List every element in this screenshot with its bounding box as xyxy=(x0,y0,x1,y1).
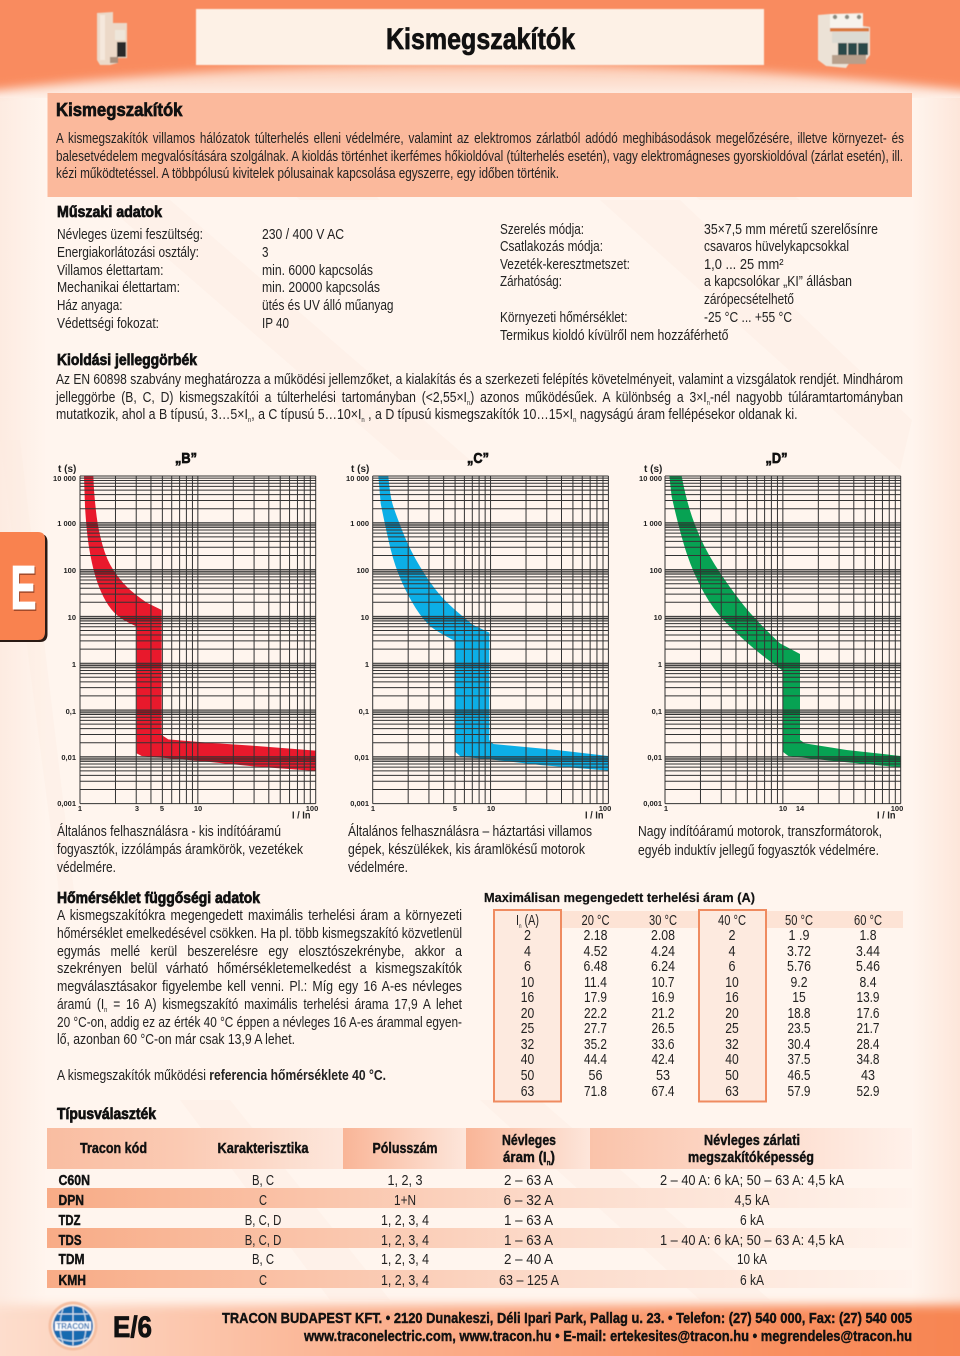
table header row: 50 °C xyxy=(785,913,813,929)
axis labels C: 10 xyxy=(487,804,495,813)
table data rows: 42.4 xyxy=(652,1052,674,1068)
tech data right column: 35×7,5 mm méretű szerelősínre xyxy=(704,222,878,238)
header cells: ) xyxy=(551,1150,555,1166)
row: C60N: 2 – 40 A: 6 kA; 50 – 63 A: 4,5 kA xyxy=(660,1173,844,1189)
table data rows: 28.4 xyxy=(856,1037,880,1053)
tech data right column: Termikus kioldó kívülről nem hozzáférhető xyxy=(500,328,728,344)
table data rows: 4 xyxy=(728,944,736,960)
table header row: (A) xyxy=(522,913,539,929)
row: DPN: DPN xyxy=(58,1193,84,1209)
table data rows: 2.18 xyxy=(584,928,608,944)
axis labels D: I / In xyxy=(877,810,896,822)
tech data left column: Névleges üzemi feszültség: xyxy=(57,227,203,243)
section tab E: E xyxy=(10,554,36,623)
header cells xyxy=(47,1128,912,1169)
axis labels B: 0,1 xyxy=(66,707,76,716)
row: KMH: C xyxy=(259,1273,267,1289)
table data rows: 3.44 xyxy=(856,944,880,960)
header cells: Karakterisztika xyxy=(218,1141,309,1157)
heading: temperature data: Hőmérséklet függőségi adatok xyxy=(57,890,260,907)
intro text: kézi működtetéssel. A többpólusú kivitelek pólusainak kapcsolása egyszerre, egy időben történik. xyxy=(56,166,559,182)
table data rows: 2 xyxy=(524,928,531,944)
tech data right column: csavaros hüvelykapcsokkal xyxy=(704,239,849,255)
heading: Műszaki adatok: Műszaki adatok xyxy=(57,204,162,221)
temperature text: A kismegszakítókra megengedett maximális terhelési áram a környezeti xyxy=(57,908,462,924)
tech data right column xyxy=(500,222,878,344)
section tab E xyxy=(0,532,48,642)
curves intro text: nagyságú áram fellépésekor oldanak ki. xyxy=(576,407,798,423)
table data rows: 50 xyxy=(521,1068,534,1084)
axis labels D: 100 xyxy=(649,566,662,575)
row: TDS: 1, 2, 3, 4 xyxy=(381,1233,429,1249)
row: TDM: B, C xyxy=(252,1252,274,1268)
tech data right column: Környezeti hőmérséklet: xyxy=(500,310,628,326)
tech data right column: Vezeték-keresztmetszet: xyxy=(500,257,630,273)
table header row xyxy=(516,913,882,930)
section tab E: E xyxy=(12,556,38,624)
header cells: Névleges xyxy=(502,1133,556,1149)
grid B xyxy=(80,476,316,804)
intro text xyxy=(56,131,904,182)
axis labels C: 100 xyxy=(356,566,369,575)
axis labels B: 1 000 xyxy=(57,519,76,528)
table data rows: 52.9 xyxy=(856,1084,880,1100)
chart: C curve xyxy=(346,450,611,822)
table data rows: 10 xyxy=(725,975,739,991)
table: max load current xyxy=(484,890,903,1102)
row: TDZ: 6 kA xyxy=(740,1213,764,1229)
curves intro text: -nél nagyobb túláramtartományban xyxy=(710,390,903,406)
table header row: n xyxy=(519,924,522,930)
axis labels C: 0,001 xyxy=(350,799,369,808)
temperature text: hőmérséklet emelkedésével csökken. Ha pl. több kismegszakító közvetlenül xyxy=(57,926,462,942)
axis labels C: 100 xyxy=(599,804,611,813)
table data rows: 16 xyxy=(521,990,534,1006)
axis labels C: I / In xyxy=(585,810,604,822)
chart: D curve xyxy=(639,450,903,822)
table data rows: 16.9 xyxy=(652,990,674,1006)
axis labels B: t (s) xyxy=(58,464,76,475)
row: C60N xyxy=(58,1173,844,1189)
axis labels D: 10 000 xyxy=(639,474,662,483)
axis labels C: 5 xyxy=(453,804,457,813)
row: C60N: 1, 2, 3 xyxy=(388,1173,422,1189)
table data rows: 50 xyxy=(725,1068,739,1084)
axis labels B xyxy=(53,464,318,822)
temperature text: szekrényen belül várható hőmérsékletemelkedést a kismegszakítók xyxy=(57,961,463,977)
row: TDM: 2 – 40 A xyxy=(504,1252,553,1268)
curves intro text: n xyxy=(573,417,577,424)
title banner xyxy=(196,9,764,65)
caption B: védelmére. xyxy=(57,860,116,876)
table data rows: 4 xyxy=(524,944,531,960)
chart title B: „B” xyxy=(175,450,197,467)
axis labels C: t (s) xyxy=(351,464,369,475)
axis labels C: 1 xyxy=(371,804,375,813)
axis labels C xyxy=(346,464,611,822)
axis labels B: 0,001 xyxy=(57,799,76,808)
table data rows: 5.76 xyxy=(787,959,811,975)
table data rows: 4.24 xyxy=(651,944,675,960)
table data rows: 13.9 xyxy=(856,990,880,1006)
table header row: 60 °C xyxy=(854,913,882,929)
temperature text: 20 °C-on, addig ez az érték 40 °C éppen a névleges 16 A-es árammal egyen- xyxy=(57,1015,462,1031)
title: Kismegszakítók xyxy=(386,23,575,56)
table data rows: 1 .9 xyxy=(788,928,810,944)
tech data left column: 230 / 400 V AC xyxy=(262,227,344,243)
table data rows: 63 xyxy=(521,1084,534,1100)
table data rows: 20 xyxy=(725,1006,739,1022)
table data rows: 71.8 xyxy=(584,1084,607,1100)
axis labels D: 1 000 xyxy=(643,519,662,528)
row: C60N: C60N xyxy=(58,1173,90,1189)
table data rows: 37.5 xyxy=(788,1052,810,1068)
axis labels C: 10 000 xyxy=(346,474,369,483)
axis labels D: 0,1 xyxy=(652,707,662,716)
table data rows: 17.9 xyxy=(584,990,607,1006)
tech data right column: a kapcsolókar „KI” állásban xyxy=(704,274,852,290)
table data rows: 63 xyxy=(725,1084,739,1100)
band: D curve green xyxy=(669,476,901,767)
axis labels C: 0,1 xyxy=(359,707,369,716)
header cells: Névleges zárlati xyxy=(704,1133,800,1149)
row: TDM: TDM xyxy=(58,1252,84,1268)
row: TDM: 1, 2, 3, 4 xyxy=(381,1252,429,1268)
temperature text: n xyxy=(104,1007,107,1014)
axis labels B: 1 xyxy=(72,660,76,669)
axis labels B: 10 xyxy=(194,804,202,813)
table data rows: 26.5 xyxy=(652,1021,674,1037)
table data rows: 16 xyxy=(725,990,739,1006)
table heading: Maximálisan megengedett terhelési áram (A) xyxy=(484,890,755,905)
row: TDS xyxy=(58,1233,844,1249)
table data rows: 3.72 xyxy=(787,944,811,960)
table header row: I xyxy=(516,913,520,929)
tech data right column: zárópecsételhető xyxy=(704,292,794,308)
curves intro text: , a D típusú kismegszakítók 10…15×I xyxy=(365,407,573,423)
axis labels B: 100 xyxy=(63,566,76,575)
table data rows: 34.8 xyxy=(856,1052,880,1068)
axis labels D: 14 xyxy=(796,804,805,813)
axis labels D: 1 xyxy=(664,804,668,813)
row: TDZ: 1, 2, 3, 4 xyxy=(381,1213,429,1229)
table data rows: 18.8 xyxy=(788,1006,810,1022)
top orange header band xyxy=(0,0,960,98)
temperature text xyxy=(57,908,463,1048)
row: DPN: C xyxy=(259,1193,267,1209)
page number: E/6 xyxy=(113,1311,152,1344)
table data rows: 5.46 xyxy=(856,959,880,975)
row: KMH: 63 – 125 A xyxy=(499,1273,559,1289)
band: C curve blue xyxy=(378,476,608,771)
curves intro text: n xyxy=(248,417,251,424)
tech data left column: min. 6000 kapcsolás xyxy=(262,263,373,279)
caption B xyxy=(57,823,304,876)
axis labels B: 1 xyxy=(78,804,82,813)
row: KMH: 6 kA xyxy=(740,1273,764,1289)
heading: Kioldási jelleggörbék: Kioldási jelleggörbék xyxy=(57,352,197,369)
row: KMH: 1, 2, 3, 4 xyxy=(381,1273,429,1289)
table data rows: 25 xyxy=(725,1021,739,1037)
table data rows: 32 xyxy=(521,1037,534,1053)
table data rows: 17.6 xyxy=(856,1006,880,1022)
caption B: Általános felhasználásra - kis indítóáramú xyxy=(57,823,281,840)
axis labels B: 3 xyxy=(135,804,139,813)
table: type selection xyxy=(47,1128,912,1289)
table data rows: 2 xyxy=(728,928,736,944)
axis labels D xyxy=(639,464,903,822)
table data rows: 33.6 xyxy=(652,1037,674,1053)
table data rows: 4.52 xyxy=(584,944,608,960)
table header row: 20 °C xyxy=(582,913,610,929)
tech data left column: Energiakorlátozási osztály: xyxy=(57,245,199,261)
table data rows: 2.08 xyxy=(651,928,675,944)
row: KMH xyxy=(58,1273,764,1289)
row: TDS: 1 – 40 A: 6 kA; 50 – 63 A: 4,5 kA xyxy=(660,1233,844,1249)
row: TDM xyxy=(58,1252,767,1268)
header cells: áram (I xyxy=(503,1150,551,1166)
tech data right column: Szerelés módja: xyxy=(500,222,584,238)
row: DPN xyxy=(58,1193,770,1209)
heading: Típusválaszték: Típusválaszték xyxy=(57,1106,156,1123)
table data rows: 23.5 xyxy=(788,1021,810,1037)
row: TDZ xyxy=(58,1213,764,1229)
axis labels D: 10 xyxy=(779,804,787,813)
row: C60N: B, C xyxy=(252,1173,274,1189)
axis labels D: 100 xyxy=(891,804,903,813)
table data rows: 9.2 xyxy=(790,975,808,991)
intro heading: Kismegszakítók xyxy=(56,99,183,120)
caption B: fogyasztók, izzólámpás áramkörök, vezetékek xyxy=(57,842,304,858)
header cells: megszakítóképesség xyxy=(688,1150,814,1166)
icon: three-pole breaker xyxy=(818,13,870,68)
tech data right column: 1,0 ... 25 mm² xyxy=(704,257,784,273)
table data rows: 32 xyxy=(725,1037,739,1053)
table data rows: 46.5 xyxy=(788,1068,810,1084)
table data rows: 44.4 xyxy=(584,1052,607,1068)
temperature text: lő, azonban 60 °C-on már csak 13,9 A lehet. xyxy=(57,1032,295,1048)
tech data left column: Villamos élettartam: xyxy=(57,263,164,279)
curves intro text: jelleggörbe (B, C, D) kismegszakítói a túlterhelési tartományban (<2,55×I xyxy=(56,390,547,406)
reference temperature note: A kismegszakítók működési referencia hőmérséklete 40 °C. xyxy=(57,1068,386,1084)
curves intro text: ) azonos működésűek. A különbség a 3×I xyxy=(470,390,707,406)
grid D xyxy=(665,476,901,804)
axis labels D: t (s) xyxy=(644,464,662,475)
tech data left column: Védettségi fokozat: xyxy=(57,316,159,332)
table data rows: 6 xyxy=(524,959,531,975)
temperature text: megválasztásakor figyelembe kell venni. Pl.: Míg egy 16 A-es névleges xyxy=(57,979,462,995)
axis labels D: 0,001 xyxy=(643,799,662,808)
caption D: Nagy indítóáramú motorok, transzformátorok, xyxy=(638,824,882,840)
header cells: Pólusszám xyxy=(372,1141,438,1157)
table header row: 40 °C xyxy=(718,913,746,929)
table data rows: 22.2 xyxy=(584,1006,607,1022)
table data rows: 6 xyxy=(728,959,736,975)
table data rows: 53 xyxy=(656,1068,670,1084)
axis labels B: 0,01 xyxy=(61,753,76,762)
row: TDS: B, C, D xyxy=(245,1233,281,1249)
row: TDZ: TDZ xyxy=(58,1213,81,1229)
curves intro text: , a C típusú 5…10×I xyxy=(251,407,361,423)
chart: B curve xyxy=(53,450,318,822)
caption D xyxy=(638,824,882,859)
axis labels B: 10 000 xyxy=(53,474,76,483)
table data rows: 40 xyxy=(725,1052,739,1068)
panel: intro xyxy=(48,93,912,197)
table data rows: 40 xyxy=(521,1052,534,1068)
caption C: gépek, készülékek, kis áramlökésű motorok xyxy=(348,842,586,858)
table data rows: 27.7 xyxy=(584,1021,607,1037)
chart title D: „D” xyxy=(766,450,788,467)
grid C xyxy=(373,476,608,804)
tech data right column: Csatlakozás módja: xyxy=(500,239,603,255)
axis labels B: 5 xyxy=(160,804,164,813)
temperature text: egymás mellé kerül beszerelésre egy elosztószekrénybe, akkor a xyxy=(57,944,463,960)
tech data left column: Mechanikai élettartam: xyxy=(57,280,180,296)
axis labels C: 0,01 xyxy=(354,753,369,762)
table data rows: 6.48 xyxy=(584,959,608,975)
table data rows xyxy=(521,928,880,1100)
table data rows: 21.2 xyxy=(652,1006,674,1022)
icon: single-pole breaker xyxy=(97,12,127,65)
temperature text: áramú (I xyxy=(57,997,114,1013)
axis labels D: 10 xyxy=(654,613,662,622)
table data rows: 8.4 xyxy=(860,975,876,991)
table data rows: 10.7 xyxy=(652,975,674,991)
axis labels C: 1 xyxy=(365,660,369,669)
axis labels B: I / In xyxy=(292,810,310,822)
table header row: 30 °C xyxy=(649,913,677,929)
curves intro text: n xyxy=(361,417,365,424)
tech data left column: min. 20000 kapcsolás xyxy=(262,280,380,296)
table data rows: 21.7 xyxy=(856,1021,880,1037)
row: C60N: 2 – 63 A xyxy=(504,1173,553,1189)
chart title C: „C” xyxy=(467,450,489,467)
header cells: Tracon kód xyxy=(80,1141,147,1157)
icon: TRACON logo xyxy=(48,1302,98,1350)
row: TDM: 10 kA xyxy=(737,1252,767,1268)
table data rows: 35.2 xyxy=(584,1037,607,1053)
axis labels D: 1 xyxy=(658,660,662,669)
row: DPN: 4,5 kA xyxy=(734,1193,770,1209)
curves intro text: n xyxy=(467,400,470,407)
icon: TRACON logo: TRACON xyxy=(56,1322,90,1331)
table data rows: 25 xyxy=(521,1021,534,1037)
axis labels B: 100 xyxy=(306,804,318,813)
axis labels C: 10 xyxy=(361,613,369,622)
tech data left column: ütés és UV álló műanyag xyxy=(262,298,394,314)
axis labels B: 10 xyxy=(68,613,76,622)
table data rows: 30.4 xyxy=(788,1037,810,1053)
table data rows: 57.9 xyxy=(788,1084,810,1100)
curves intro text: n xyxy=(707,400,710,407)
band: B curve red xyxy=(84,476,316,771)
table data rows: 15 xyxy=(792,990,806,1006)
row: TDS: TDS xyxy=(58,1233,82,1249)
header cells: n xyxy=(547,1160,551,1167)
table data rows: 10 xyxy=(521,975,534,991)
table data rows: 67.4 xyxy=(652,1084,674,1100)
caption C: Általános felhasználásra – háztartási villamos xyxy=(348,823,592,840)
caption C xyxy=(348,823,592,876)
footer band xyxy=(0,1302,960,1356)
row: TDZ: B, C, D xyxy=(245,1213,281,1229)
tech data right column: Zárhatóság: xyxy=(500,274,562,290)
axis labels D: 0,01 xyxy=(647,753,662,762)
tech data left column: IP 40 xyxy=(262,316,289,332)
table data rows: 11.4 xyxy=(584,975,607,991)
curves intro text xyxy=(55,372,903,424)
tech data left column: Ház anyaga: xyxy=(57,298,122,314)
curves intro text: mutatkozik, ahol a B típusú, 3…5×I xyxy=(56,407,281,423)
table data rows: 43 xyxy=(861,1068,875,1084)
row: DPN: 6 – 32 A xyxy=(504,1193,554,1209)
table data rows: 56 xyxy=(588,1068,602,1084)
tech data right column: -25 °C ... +55 °C xyxy=(704,310,792,326)
row: TDS: 1 – 63 A xyxy=(504,1233,553,1249)
tech data left column xyxy=(57,227,394,332)
caption D: egyéb induktív jellegű fogyasztók védelmére. xyxy=(638,843,879,859)
footer contact text xyxy=(222,1311,912,1345)
axis labels C: 1 000 xyxy=(350,519,369,528)
table data rows: 6.24 xyxy=(651,959,675,975)
row: TDZ: 1 – 63 A xyxy=(504,1213,553,1229)
temperature text: = 16 A) kismegszakító maximális terhelési árama 17,9 A lehet xyxy=(107,997,462,1013)
row stripes xyxy=(47,1188,912,1288)
row: KMH: KMH xyxy=(58,1273,86,1289)
table data rows: 20 xyxy=(521,1006,534,1022)
row: DPN: 1+N xyxy=(394,1193,416,1209)
tech data left column: 3 xyxy=(262,245,268,261)
caption C: védelmére. xyxy=(348,860,408,876)
table data rows: 1.8 xyxy=(860,928,876,944)
